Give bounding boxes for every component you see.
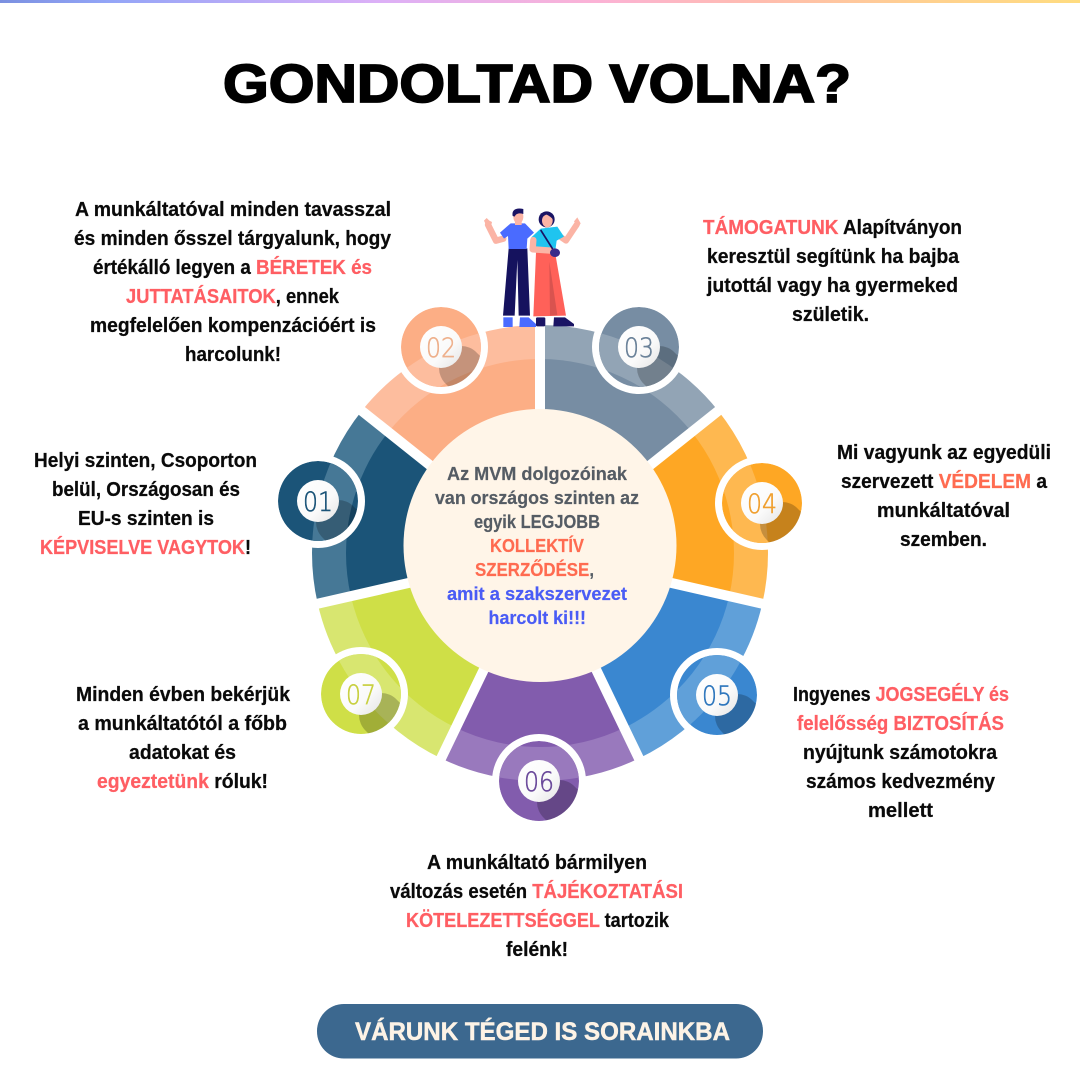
text: 03 support bbox=[703, 216, 962, 326]
badge 01: 01 bbox=[303, 487, 333, 518]
badge 01 bbox=[278, 456, 365, 548]
text: 07 data: a munkáltatótól a főbb bbox=[78, 713, 287, 735]
text: 07 data: Minden évben bekérjük bbox=[76, 684, 291, 706]
text: 05 legal aid: felelősség BIZTOSÍTÁS bbox=[797, 712, 1004, 735]
segment 05 bbox=[540, 553, 762, 758]
man bbox=[484, 208, 536, 327]
text: 05 legal aid: mellett bbox=[868, 800, 933, 822]
wheel diagram bbox=[311, 318, 769, 781]
segment 04 bbox=[540, 411, 768, 604]
text: 07 data: egyeztetünk róluk! bbox=[97, 771, 268, 793]
text: 04 protection: Mi vagyunk az egyedüli bbox=[837, 442, 1051, 464]
center circle bbox=[404, 409, 676, 682]
text: 01 representation bbox=[34, 450, 257, 559]
center text bbox=[435, 463, 639, 628]
text: 04 protection: szemben. bbox=[900, 529, 987, 551]
badge 05: 05 bbox=[702, 681, 732, 712]
center text: harcolt ki!!! bbox=[488, 607, 586, 628]
text: 01 representation: KÉPVISELVE VAGYTOK! bbox=[40, 536, 251, 559]
badge 07 bbox=[321, 647, 408, 734]
segment 06 bbox=[441, 553, 639, 781]
text: 06 information: KÖTELEZETTSÉGGEL tartozik bbox=[406, 909, 670, 932]
text: 02 wages bbox=[74, 199, 392, 366]
text: 05 legal aid: nyújtunk számotokra bbox=[803, 742, 998, 764]
text: 02 wages: harcolunk! bbox=[185, 344, 281, 366]
text: 03 support: keresztül segítünk ha bajba bbox=[707, 246, 960, 268]
badge 04 bbox=[715, 458, 802, 550]
segment 03 bbox=[540, 325, 718, 553]
badge 06: 06 bbox=[524, 767, 554, 798]
text: 03 support: TÁMOGATUNK Alapítványon bbox=[703, 216, 962, 239]
text: 02 wages: értékálló legyen a BÉRETEK és bbox=[93, 256, 372, 279]
badge 06 bbox=[492, 734, 586, 821]
call to action button: VÁRUNK TÉGED IS SORAINKBA bbox=[355, 1017, 730, 1046]
top gradient bar bbox=[0, 0, 1080, 3]
woman bbox=[531, 211, 581, 326]
text: 07 data: adatokat és bbox=[129, 742, 236, 764]
segment 01 bbox=[312, 411, 540, 604]
badge 05 bbox=[670, 648, 757, 735]
center text: van országos szinten az bbox=[435, 487, 639, 508]
badge 03 bbox=[592, 307, 679, 394]
badge 02 bbox=[401, 307, 488, 394]
center text: KOLLEKTÍV bbox=[490, 535, 585, 556]
segment 07 bbox=[318, 553, 540, 758]
text: 01 representation: EU-s szinten is bbox=[78, 508, 214, 530]
text: 02 wages: megfelelően kompenzációért is bbox=[90, 315, 376, 337]
title: GONDOLTAD VOLNA? bbox=[223, 54, 851, 114]
text: 06 information bbox=[390, 852, 683, 961]
text: 04 protection bbox=[837, 442, 1051, 551]
text: 05 legal aid: Ingyenes JOGSEGÉLY és bbox=[793, 683, 1009, 706]
text: 02 wages: JUTTATÁSAITOK, ennek bbox=[126, 285, 340, 308]
badge 04: 04 bbox=[747, 489, 777, 520]
text: 01 representation: belül, Országosan és bbox=[52, 479, 240, 501]
text: 02 wages: A munkáltatóval minden tavasszal bbox=[75, 199, 391, 221]
text: 04 protection: munkáltatóval bbox=[877, 500, 1010, 522]
center text: egyik LEGJOBB bbox=[474, 511, 600, 532]
center text: SZERZŐDÉSE, bbox=[475, 559, 594, 580]
text: 04 protection: szervezett VÉDELEM a bbox=[841, 470, 1048, 493]
text: 05 legal aid: számos kedvezmény bbox=[806, 771, 996, 793]
badge 07: 07 bbox=[346, 680, 376, 711]
call to action button bbox=[317, 1004, 763, 1058]
text: 01 representation: Helyi szinten, Csoporton bbox=[34, 450, 257, 472]
segment 02 bbox=[362, 325, 540, 553]
text: 06 information: felénk! bbox=[506, 939, 568, 961]
badge 03: 03 bbox=[624, 333, 654, 364]
text: 03 support: születik. bbox=[792, 304, 869, 326]
text: 03 support: jutottál vagy ha gyermeked bbox=[706, 275, 958, 297]
text: 06 information: A munkáltató bármilyen bbox=[427, 852, 647, 874]
text: 05 legal aid bbox=[793, 683, 1009, 822]
text: 02 wages: és minden ősszel tárgyalunk, hogy bbox=[74, 228, 392, 250]
text: 06 information: változás esetén TÁJÉKOZTATÁSI bbox=[390, 880, 683, 903]
badge 02: 02 bbox=[426, 333, 456, 364]
illustration: two people bbox=[484, 208, 581, 327]
text: 07 data bbox=[76, 684, 291, 793]
center text: Az MVM dolgozóinak bbox=[447, 463, 628, 484]
center text: amit a szakszervezet bbox=[447, 583, 627, 604]
